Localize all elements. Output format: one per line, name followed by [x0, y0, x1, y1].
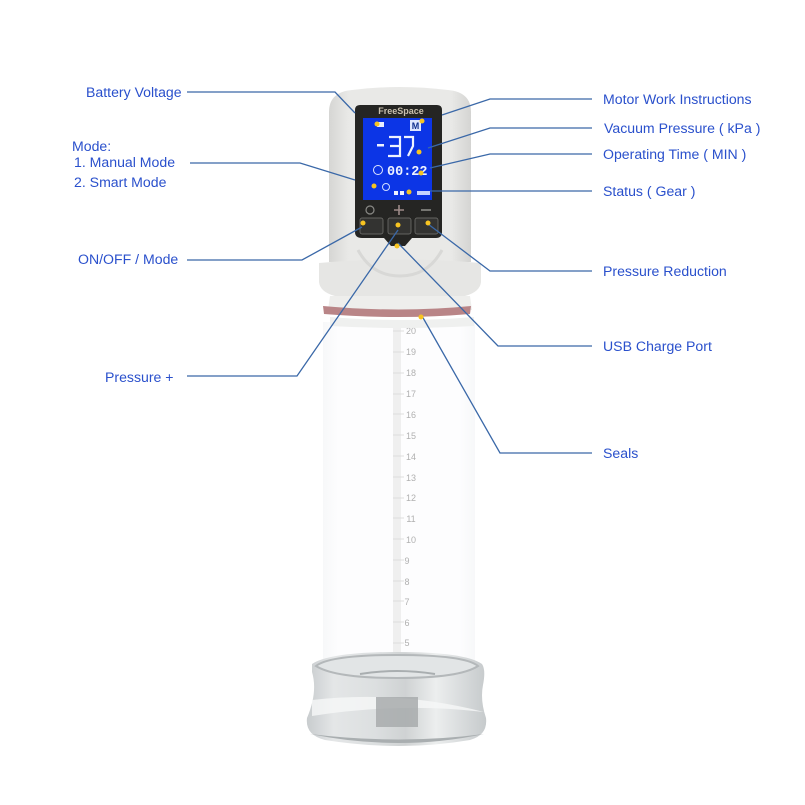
scale: 14	[406, 452, 416, 462]
scale	[393, 322, 416, 654]
label: motor work: Motor Work Instructions	[603, 91, 752, 107]
scale: 19	[406, 347, 416, 357]
scale: 7	[404, 597, 410, 607]
control panel bezel	[355, 105, 442, 246]
leader lines	[187, 92, 592, 453]
LCD screen: 00:22	[387, 165, 428, 180]
label: smart mode: 2. Smart Mode	[74, 174, 166, 190]
scale: 6	[404, 618, 410, 628]
label: seals: Seals	[603, 445, 638, 461]
seal ring	[323, 306, 471, 317]
scale: 17	[406, 389, 416, 399]
label: pressure plus: Pressure +	[105, 369, 174, 385]
scale: 15	[406, 431, 416, 441]
buttons	[360, 205, 438, 234]
tube	[323, 322, 475, 668]
scale: 8	[404, 577, 410, 587]
scale: 12	[406, 493, 416, 503]
brand: FreeSpace	[378, 106, 424, 116]
label: usb charge port: USB Charge Port	[603, 338, 712, 354]
label: operating time: Operating Time ( MIN )	[603, 146, 746, 162]
label: manual mode: 1. Manual Mode	[74, 154, 175, 170]
scale: 20	[406, 326, 416, 336]
pump head	[319, 87, 481, 310]
label: on/off mode: ON/OFF / Mode	[78, 251, 178, 267]
scale: 5	[404, 638, 410, 648]
scale: 9	[404, 556, 410, 566]
scale: 18	[406, 368, 416, 378]
label: status: Status ( Gear )	[603, 183, 695, 199]
LCD screen	[363, 118, 432, 200]
scale: 16	[406, 410, 416, 420]
label: battery voltage: Battery Voltage	[86, 84, 182, 100]
scale: 11	[406, 514, 416, 524]
label: mode: Mode:	[72, 138, 111, 154]
LCD screen: M	[412, 121, 419, 131]
scale: 13	[406, 473, 416, 483]
callout dots	[360, 118, 430, 320]
label: pressure reduction: Pressure Reduction	[603, 263, 727, 279]
base ring	[307, 652, 486, 746]
label: vacuum pressure: Vacuum Pressure ( kPa )	[604, 120, 760, 136]
scale: 10	[406, 535, 416, 545]
